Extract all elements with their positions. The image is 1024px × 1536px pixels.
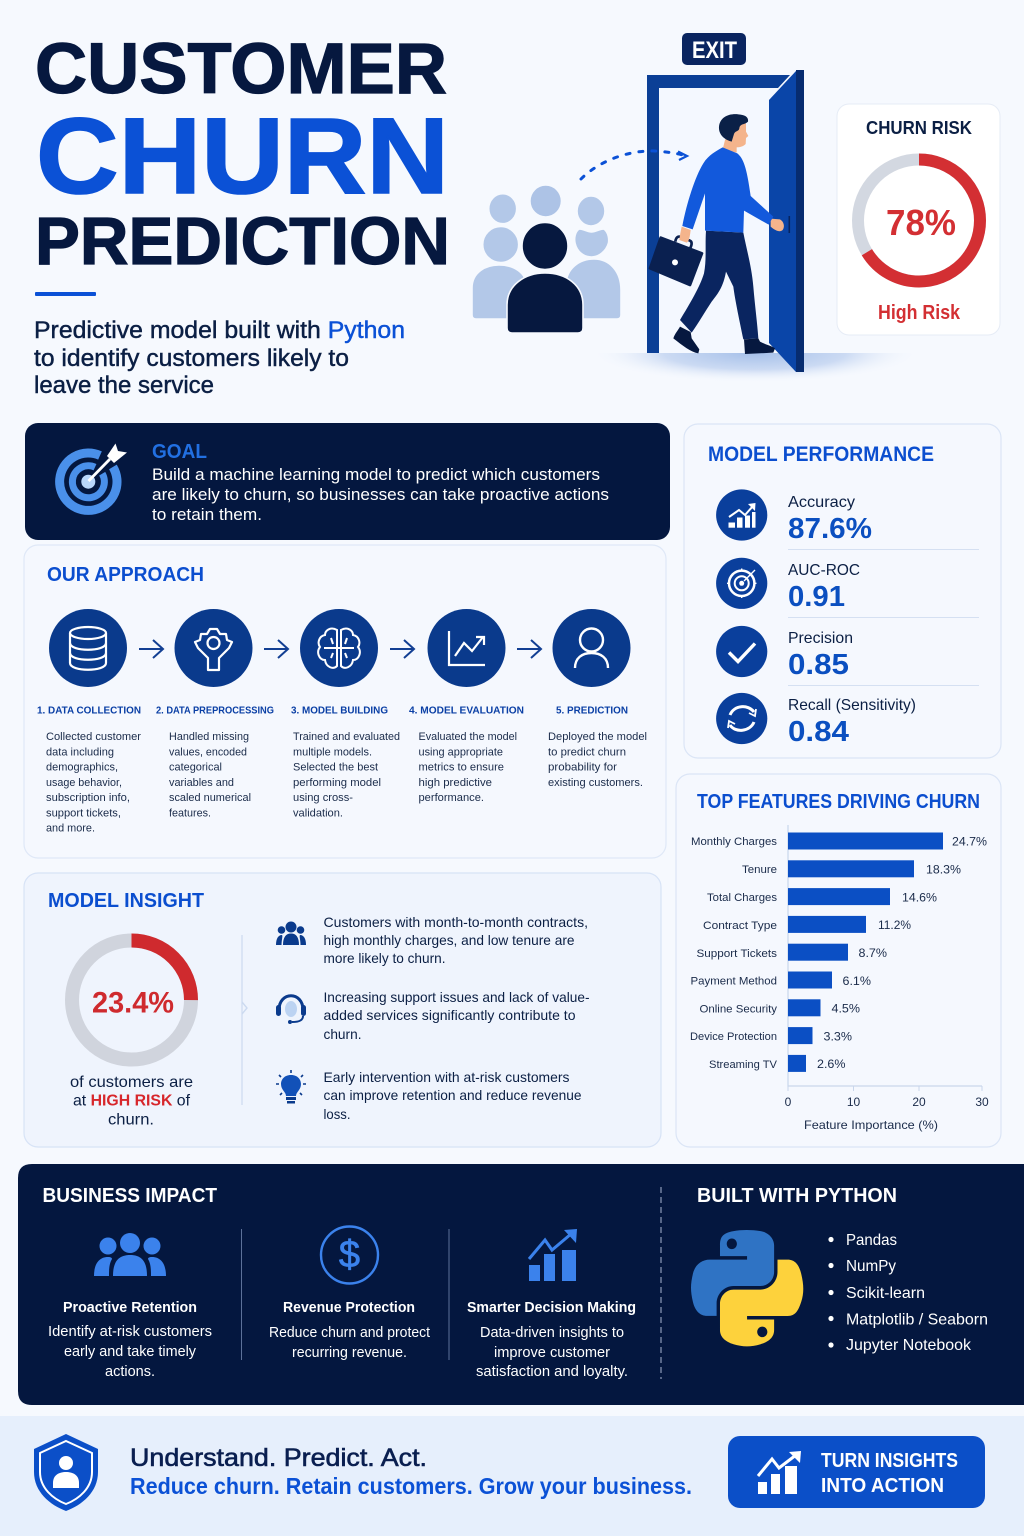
step 3 text: validation. (293, 807, 343, 819)
bar labels: Contract Type (703, 920, 777, 932)
bar values: 6.1% (842, 974, 871, 988)
title (35, 30, 450, 279)
insight caption (70, 1074, 193, 1128)
axis labels: Feature Importance (%) (804, 1118, 938, 1132)
step 1 text: subscription info, (46, 792, 130, 804)
step 3 text: Selected the best (293, 762, 378, 774)
icon: auc target (727, 568, 756, 598)
step labels (37, 704, 628, 716)
python library list: NumPy (846, 1258, 896, 1275)
bar labels: Monthly Charges (691, 836, 777, 848)
metric: accuracy (788, 494, 872, 545)
subtitle (34, 317, 405, 399)
step 1 text: Collected customer (46, 731, 141, 743)
metric: auc-roc (788, 562, 860, 613)
impact text 1: Identify at-risk customers (48, 1324, 212, 1340)
step 2 text: categorical (169, 762, 222, 774)
gauge heading: CHURN RISK (866, 118, 972, 138)
panel: goal (25, 423, 670, 540)
impact text 3: improve customer (494, 1345, 610, 1361)
impact headings: Smarter Decision Making (467, 1299, 636, 1316)
insight text 1: more likely to churn. (324, 950, 446, 966)
exit sign: EXIT (692, 37, 737, 64)
goal text (152, 466, 609, 524)
icon: recall cycle (728, 707, 756, 730)
bar values: 24.7% (952, 834, 987, 848)
insight text 1: Customers with month-to-month contracts, (324, 914, 588, 930)
step 4 text: using appropriate (418, 746, 503, 758)
icon: retention people (94, 1233, 166, 1276)
icon: check (729, 644, 755, 662)
step 2 text (169, 731, 251, 819)
icon: accuracy (728, 503, 756, 528)
step labels: 1. DATA COLLECTION (37, 704, 141, 716)
icon: evaluation chart (449, 631, 485, 665)
title: CUSTOMER (35, 30, 447, 109)
step 5 text (548, 731, 647, 789)
step 2 text: variables and (169, 777, 234, 789)
step 1 text: data including (46, 746, 114, 758)
insight text 2: churn. (324, 1026, 362, 1042)
bar values: 8.7% (858, 946, 887, 960)
insight text 3 (324, 1069, 582, 1122)
python library list: Scikit-learn (846, 1285, 925, 1302)
axis labels (785, 1095, 989, 1132)
icon: prediction user (575, 628, 608, 668)
bar values: 3.3% (824, 1030, 852, 1044)
step 2 text: Handled missing (169, 731, 249, 743)
step 5 text: Deployed the model (548, 731, 647, 743)
insight caption: of customers are (70, 1074, 193, 1091)
impact text 1: early and take timely (64, 1344, 197, 1360)
axis labels: 20 (912, 1095, 926, 1109)
panel: business impact (18, 1164, 1024, 1405)
bar values (817, 834, 987, 1071)
icon: preprocessing gear (195, 629, 232, 670)
button icon (758, 1451, 801, 1494)
axis labels: 10 (847, 1095, 860, 1109)
bar values: 18.3% (926, 862, 961, 876)
performance heading: MODEL PERFORMANCE (708, 443, 934, 466)
icon: shield (34, 1434, 98, 1511)
step labels: 2. DATA PREPROCESSING (156, 704, 274, 716)
axis labels: 30 (975, 1095, 989, 1109)
bar values: 14.6% (902, 890, 937, 904)
insight value: 23.4% (92, 986, 174, 1020)
footer tagline: Reduce churn. Retain customers. Grow your business. (130, 1473, 692, 1499)
impact text 3: satisfaction and loyalty. (476, 1364, 628, 1380)
icon: revenue dollar (321, 1226, 378, 1284)
title: CHURN (36, 95, 449, 216)
button text: TURN INSIGHTS (821, 1450, 958, 1472)
python library list: Matplotlib / Seaborn (846, 1312, 988, 1328)
business impact heading: BUSINESS IMPACT (42, 1185, 217, 1207)
metric: recall: Recall (Sensitivity) (788, 697, 916, 714)
step 5 text: existing customers. (548, 777, 643, 789)
python library list: Jupyter Notebook (846, 1337, 972, 1354)
bar labels: Device Protection (690, 1031, 777, 1043)
subtitle: to identify customers likely to (34, 345, 349, 372)
step 1 text: support tickets, (46, 807, 121, 819)
step 4 text: metrics to ensure (418, 762, 504, 774)
footer headline: Understand. Predict. Act. (130, 1444, 427, 1472)
arrow: dotted leaving path (581, 151, 687, 179)
arrows between steps (139, 640, 541, 658)
insight text 3: loss. (324, 1106, 350, 1122)
insight text 3: Early intervention with at-risk customers (324, 1069, 570, 1085)
floor shadow (623, 353, 888, 377)
step 4 text: high predictive (418, 777, 492, 789)
features heading: TOP FEATURES DRIVING CHURN (697, 790, 980, 813)
panel: model insight (24, 873, 661, 1147)
icon: revenue dollar: $ (339, 1234, 360, 1276)
step 4 text: Evaluated the model (418, 731, 517, 743)
python library list: Pandas (846, 1232, 897, 1249)
step 3 text: Trained and evaluated (293, 731, 400, 743)
bar labels (690, 836, 777, 1071)
step 3 text: using cross- (293, 792, 353, 804)
panel: model performance (684, 424, 1001, 758)
step 3 text: multiple models. (293, 746, 372, 758)
step 4 text: performance. (418, 792, 484, 804)
metric: accuracy: 87.6% (788, 513, 872, 545)
gauge value: 78% (886, 202, 956, 243)
metric: precision: Precision (788, 630, 853, 647)
button text (821, 1450, 958, 1497)
step 5 text: probability for (548, 762, 617, 774)
insight heading: MODEL INSIGHT (48, 889, 204, 912)
metric: recall: 0.84 (788, 716, 849, 748)
bar values: 4.5% (832, 1002, 860, 1016)
person walking out (650, 114, 784, 354)
button text: INTO ACTION (821, 1475, 944, 1497)
insight text 1: high monthly charges, and low tenure are (324, 932, 575, 948)
step 3 text: performing model (293, 777, 381, 789)
icon: database (70, 627, 106, 670)
impact headings: Proactive Retention (63, 1299, 197, 1316)
subtitle: Predictive model built with Python (34, 317, 405, 344)
insight text 2 (324, 989, 590, 1042)
icon: customers (276, 922, 306, 945)
step 5 text: to predict churn (548, 746, 626, 758)
step labels: 4. MODEL EVALUATION (409, 704, 524, 716)
subtitle: leave the service (34, 372, 214, 399)
metric icon circles (716, 489, 767, 744)
metric: auc-roc: 0.91 (788, 581, 845, 613)
insight text 2: Increasing support issues and lack of value- (324, 989, 590, 1005)
bar labels: Online Security (700, 1004, 777, 1016)
metric: precision: 0.85 (788, 649, 849, 681)
goal heading: GOAL (152, 441, 207, 463)
panel: churn risk gauge (837, 104, 1000, 335)
icon: headset (276, 996, 306, 1024)
goal text: are likely to churn, so businesses can take proactive actions (152, 486, 609, 504)
insight donut (72, 940, 191, 1060)
axis labels: 0 (785, 1095, 792, 1109)
goal text: to retain them. (152, 506, 262, 524)
panel: footer (0, 1416, 1024, 1536)
impact text 2: recurring revenue. (292, 1345, 407, 1361)
impact text 3: Data-driven insights to (480, 1325, 624, 1341)
metric: precision (788, 630, 853, 681)
impact headings (63, 1299, 636, 1316)
insight text 1 (324, 914, 588, 966)
step 1 text: demographics, (46, 762, 118, 774)
impact text 1: actions. (105, 1364, 155, 1380)
impact text 1 (48, 1324, 212, 1380)
step 1 text (46, 731, 141, 834)
icon: customer group (472, 185, 621, 333)
impact text 2: Reduce churn and protect (269, 1325, 430, 1341)
door (647, 70, 804, 372)
bar labels: Total Charges (707, 892, 777, 904)
impact headings: Revenue Protection (283, 1299, 415, 1316)
step 4 text (418, 731, 517, 804)
bar values: 11.2% (878, 918, 911, 932)
step 2 text: values, encoded (169, 746, 247, 758)
step 3 text (293, 731, 400, 819)
insight text 3: can improve retention and reduce revenue (324, 1087, 582, 1103)
approach heading: OUR APPROACH (47, 563, 204, 586)
icon: lightbulb (276, 1070, 306, 1104)
icon: decision chart (529, 1229, 577, 1281)
gauge label: High Risk (878, 302, 961, 324)
panel: our approach (24, 545, 666, 858)
insight text 2: added services significantly contribute to (324, 1007, 576, 1023)
bar chart (690, 825, 989, 1132)
step 2 text: scaled numerical (169, 792, 251, 804)
goal text: Build a machine learning model to predict which customers (152, 466, 600, 484)
title: PREDICTION (35, 204, 450, 279)
gauge ring (858, 160, 980, 282)
step 1 text: and more. (46, 822, 95, 834)
panel: top features (676, 774, 1001, 1147)
bar labels: Payment Method (690, 976, 777, 988)
icon: python logo (691, 1230, 803, 1346)
button: turn insights into action (728, 1436, 985, 1508)
step 2 text: features. (169, 807, 211, 819)
impact text 3 (476, 1325, 628, 1380)
metric: recall (788, 697, 916, 748)
insight caption: at HIGH RISK of (73, 1092, 191, 1110)
python library list (828, 1232, 988, 1354)
bar labels: Support Tickets (696, 948, 777, 960)
metric: auc-roc: AUC-ROC (788, 562, 860, 579)
step circles (49, 609, 630, 687)
icon: target (60, 444, 127, 510)
bar labels: Streaming TV (709, 1059, 777, 1071)
impact text 2 (269, 1325, 430, 1361)
bar labels: Tenure (742, 864, 777, 876)
step 1 text: usage behavior, (46, 777, 122, 789)
bar values: 2.6% (817, 1057, 846, 1071)
insight caption: churn. (108, 1112, 154, 1128)
metric: accuracy: Accuracy (788, 494, 855, 511)
step labels: 3. MODEL BUILDING (291, 704, 388, 716)
step labels: 5. PREDICTION (556, 704, 628, 716)
icon: brain (318, 629, 360, 668)
built with python heading: BUILT WITH PYTHON (697, 1185, 897, 1207)
